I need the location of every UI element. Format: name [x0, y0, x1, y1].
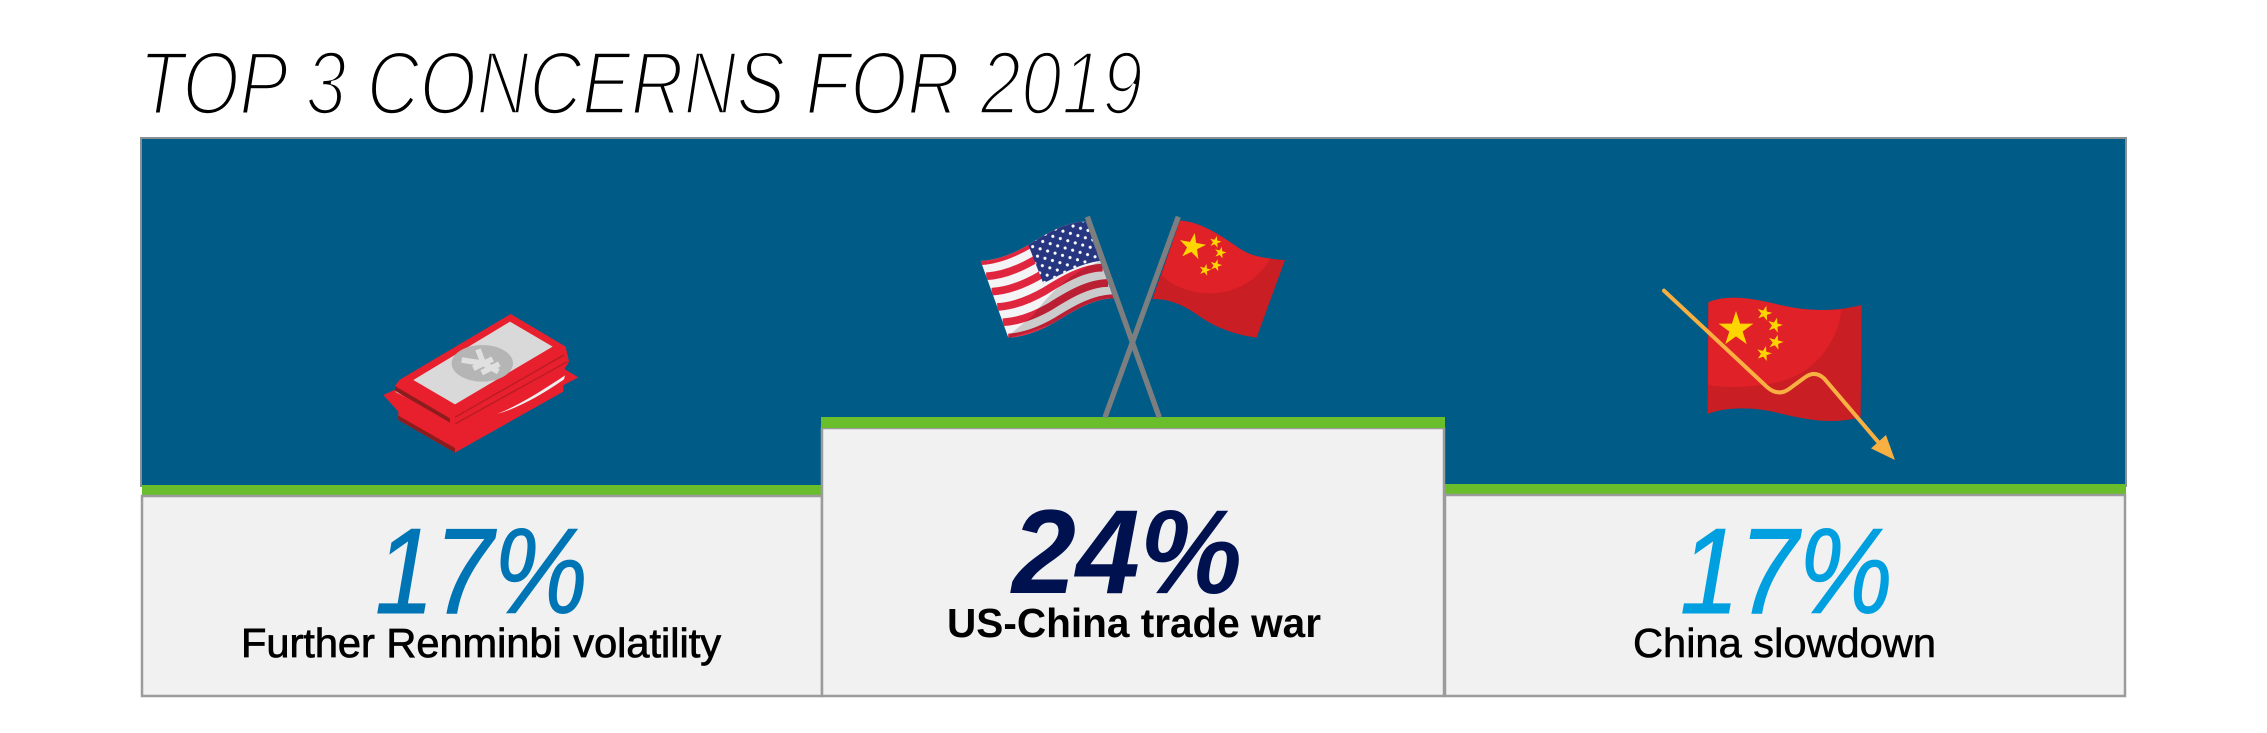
label: Further Renminbi volatility: Further Renminbi volatility	[241, 620, 721, 666]
US flag	[980, 222, 1114, 338]
percentage: 17%: 17%	[1680, 503, 1893, 639]
falling arrow	[1664, 291, 1895, 460]
flag	[1708, 298, 1862, 421]
icon: China flag with falling arrow	[1664, 291, 1895, 460]
flag poles	[1087, 217, 1178, 417]
panel: US-China trade war	[821, 417, 1445, 696]
percentage: 24%: 24%	[1010, 485, 1242, 619]
blue banner	[141, 138, 2126, 486]
percentage: 17%: 17%	[375, 503, 588, 639]
icon: crossed US and China flags	[977, 217, 1285, 417]
icon: stack of renminbi notes	[383, 314, 578, 453]
label: China slowdown: China slowdown	[1633, 620, 1936, 666]
title: TOP 3 CONCERNS FOR 2019	[139, 34, 1143, 134]
China flag	[1152, 221, 1285, 338]
panel: China slowdown	[1445, 484, 2126, 696]
label: US-China trade war: US-China trade war	[947, 600, 1321, 646]
panel: Further Renminbi volatility	[142, 485, 822, 696]
